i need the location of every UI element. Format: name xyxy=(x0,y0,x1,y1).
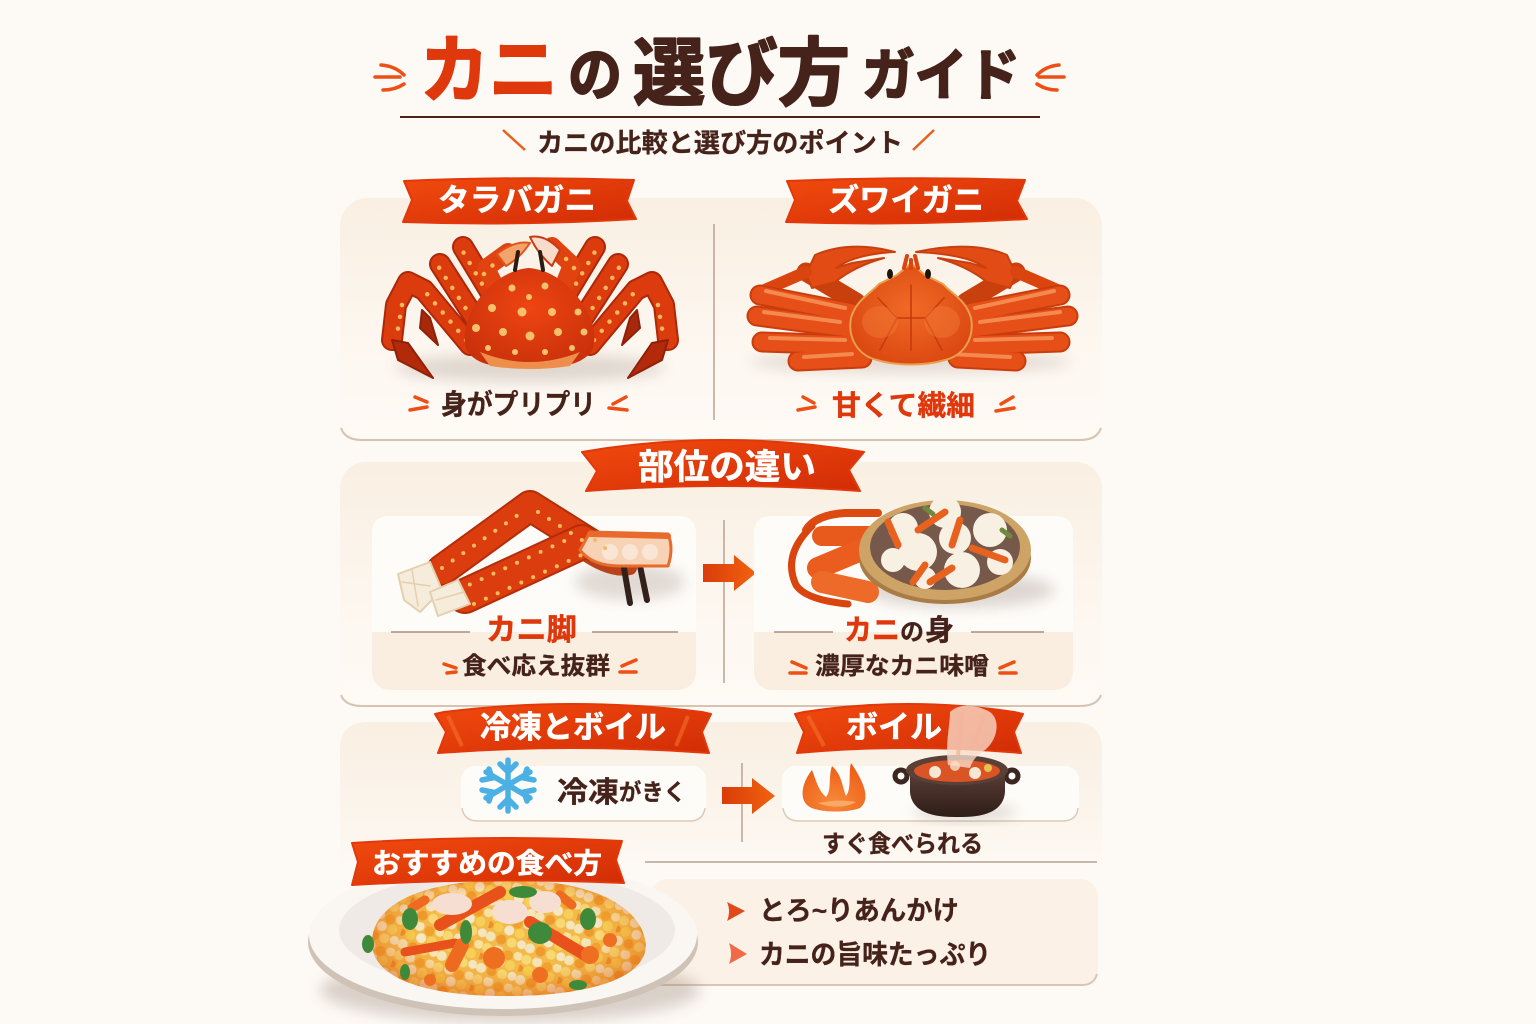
label: 甘くて繊細: 甘くて繊細 xyxy=(832,390,975,421)
divider and arrow xyxy=(703,520,756,683)
label: 甘くて繊細 xyxy=(798,390,1014,421)
label: 身がプリプリ: 身がプリプリ xyxy=(441,388,596,420)
icon: snowflake xyxy=(482,760,534,811)
illustration: plate of fried rice xyxy=(308,861,700,1022)
card: crab legs: 食べ応え抜群 xyxy=(462,653,610,680)
title: の xyxy=(568,43,622,108)
heading: おすすめの食べ方: おすすめの食べ方 xyxy=(372,848,602,879)
card: freezes well xyxy=(461,766,706,821)
list item 1: とろ~りあんかけ xyxy=(759,896,959,926)
divider and arrow xyxy=(722,763,775,842)
card: ready to eat: すぐ食べられる xyxy=(822,831,983,858)
card: crab meat: 濃厚なカニ味噌 xyxy=(815,653,989,680)
title: 選び方 xyxy=(633,32,850,115)
card: freezes well: 冷凍 xyxy=(557,776,619,809)
heading: 部位の違い xyxy=(582,440,864,491)
panel: crab comparison xyxy=(340,198,1102,440)
illustration: king crab xyxy=(392,237,668,382)
card: crab meat: カニ xyxy=(844,615,900,647)
icon: flame xyxy=(803,763,866,812)
card: crab legs: カニ脚 xyxy=(486,614,577,647)
heading: ボイル xyxy=(795,704,1023,753)
card: freezes well: がきく xyxy=(619,779,686,805)
illustration: basket of crab meat xyxy=(792,496,1055,608)
panel: freezing and boiling xyxy=(340,722,1102,862)
heading: おすすめの食べ方 xyxy=(352,838,624,885)
illustration: crab legs xyxy=(398,506,685,616)
heading: 冷凍とボイル: 冷凍とボイル xyxy=(480,710,666,745)
title rule xyxy=(400,116,1040,118)
heading: 部位の違い: 部位の違い xyxy=(638,448,816,487)
card: crab meat: の xyxy=(900,619,924,646)
panel: parts xyxy=(340,462,1102,707)
illustration: snow crab xyxy=(751,247,1071,373)
heading: 冷凍とボイル xyxy=(435,704,711,753)
panel: serving list xyxy=(650,879,1098,986)
heading: タラバガニ: タラバガニ xyxy=(438,183,596,218)
card: ready to eat xyxy=(782,766,1079,858)
heading: タラバガニ xyxy=(403,178,636,223)
heading: ボイル: ボイル xyxy=(846,710,942,745)
title: ガイド xyxy=(862,44,1020,107)
subtitle: カニの比較と選び方のポイント xyxy=(537,128,903,158)
heading: ズワイガニ xyxy=(786,178,1027,223)
title sparks xyxy=(375,65,1064,90)
heading: ズワイガニ: ズワイガニ xyxy=(828,183,984,218)
card: crab legs xyxy=(372,516,696,690)
icon: hot pot with steam xyxy=(895,706,1018,820)
card: crab meat: 身 xyxy=(925,614,954,647)
list item 2: カニの旨味たっぷり xyxy=(759,940,991,970)
title xyxy=(420,29,1020,115)
card: crab meat xyxy=(754,516,1073,690)
title: カニ xyxy=(420,29,558,112)
